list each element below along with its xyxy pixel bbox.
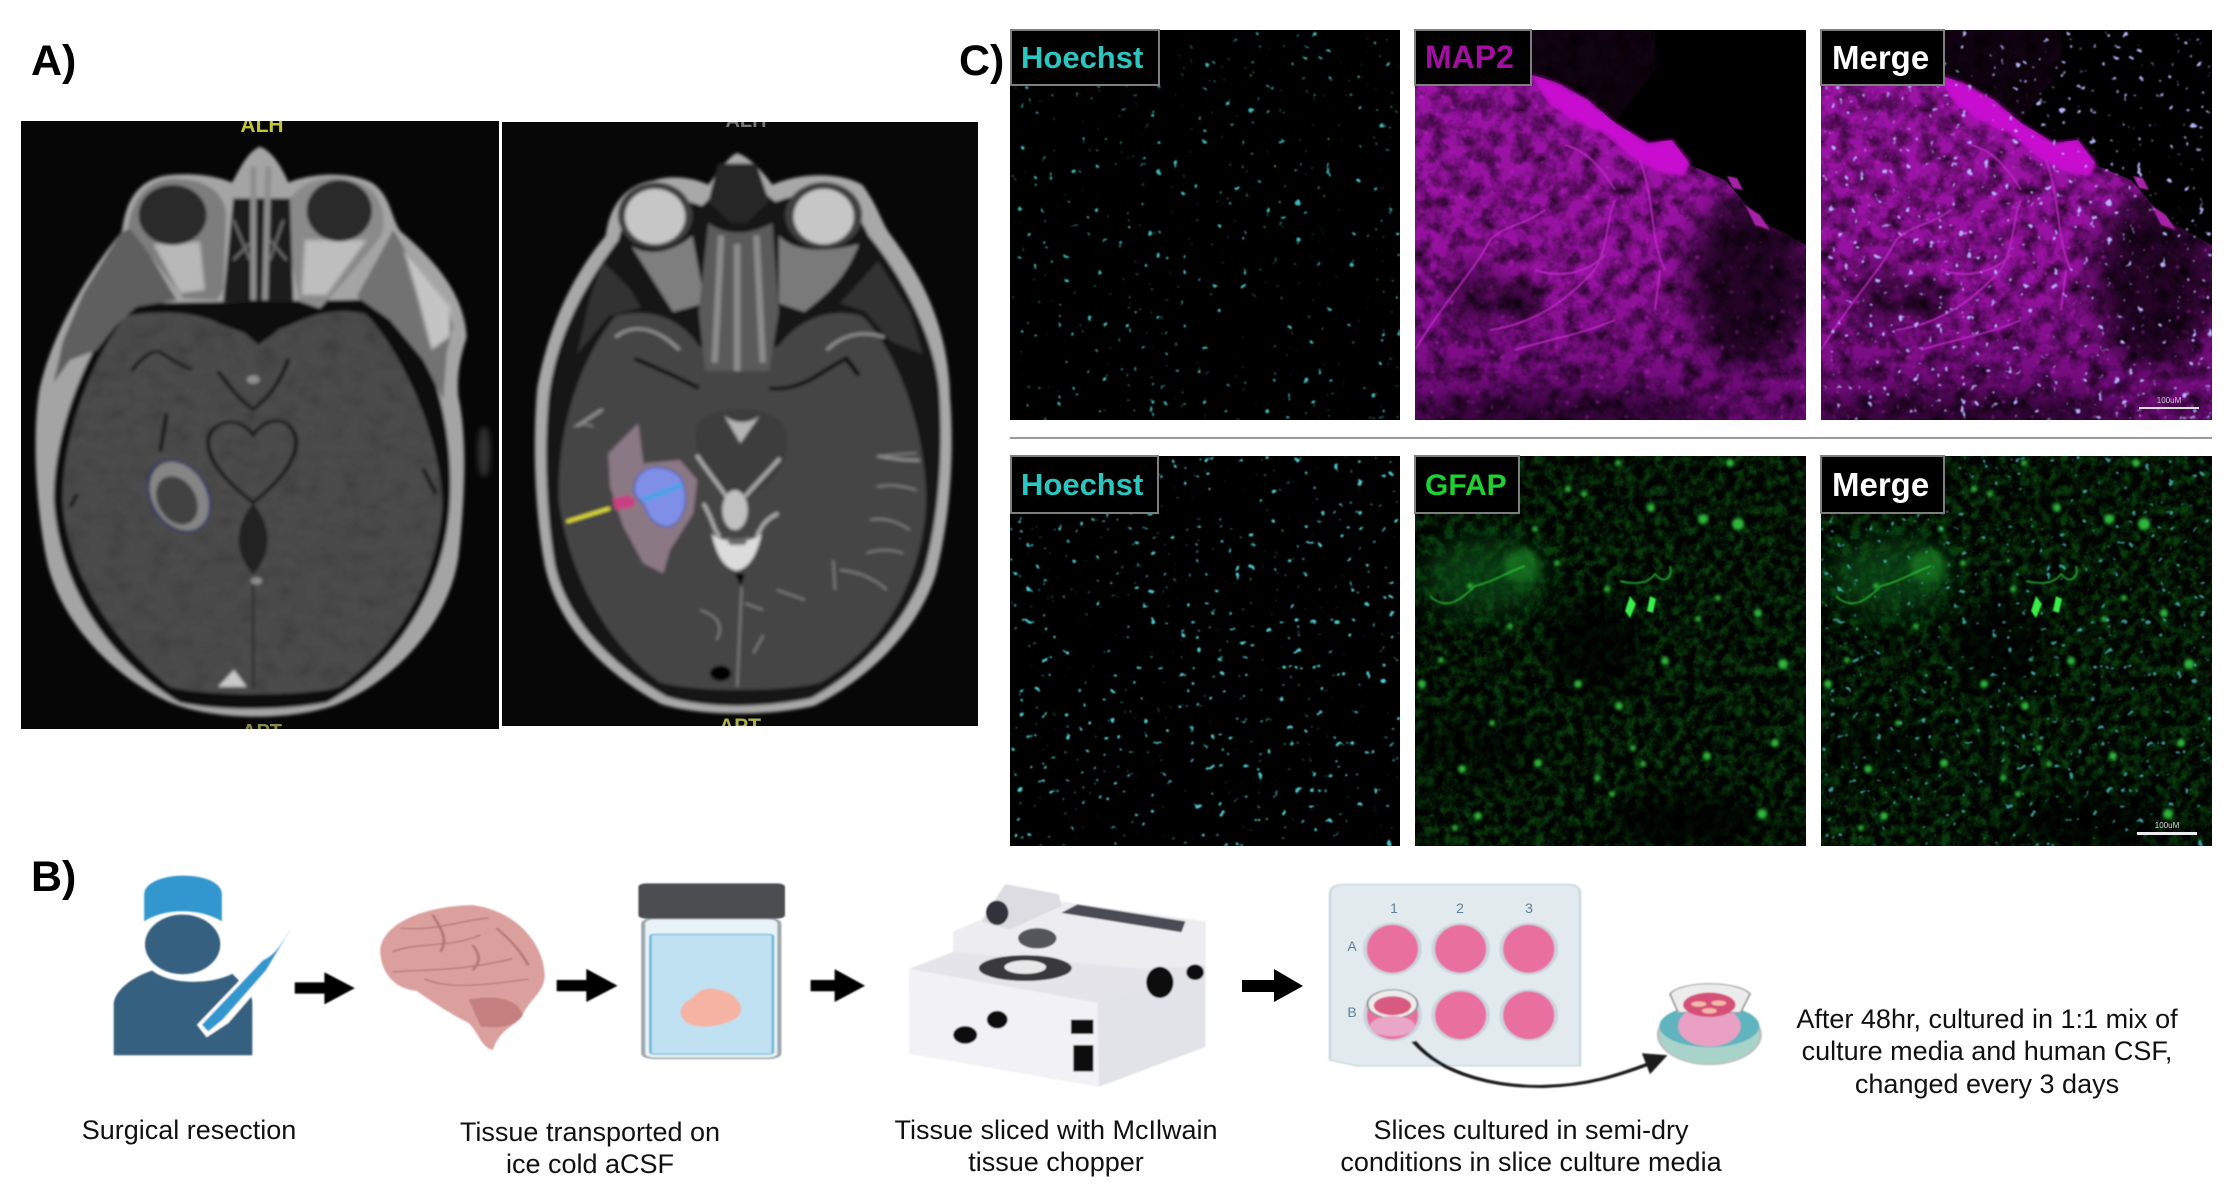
caption: slice culture: conditions in slice culture media (1340, 1147, 1723, 1177)
scale bar top (2139, 396, 2199, 409)
row divider (1010, 437, 2212, 439)
label: Hoechst top: Hoechst (1021, 40, 1143, 75)
cistern (697, 455, 780, 537)
label: Merge bottom (1821, 456, 1944, 513)
panel A: T1 contrast MRI scan (21, 114, 499, 743)
curved arrow (1414, 1041, 1650, 1086)
scalp outline (36, 147, 467, 717)
lower sulci (573, 424, 917, 687)
caption: tissue transport: ice cold aCSF (506, 1149, 674, 1179)
label: Merge bottom: Merge (1832, 466, 1929, 503)
midbrain (757, 414, 761, 416)
panel C: Hoechst top (1010, 30, 1400, 420)
left orbit (128, 179, 226, 300)
yellow arrow (567, 508, 610, 522)
panel C: MAP2 merge (1821, 30, 2218, 437)
nasal cavity (223, 198, 293, 302)
culture insert (1658, 984, 1761, 1064)
plate (1330, 884, 1580, 1066)
right scan: lower brain detail (567, 423, 917, 687)
panel A: T2 MRI scan (502, 110, 978, 738)
label: Merge top (1821, 30, 1944, 85)
arrow 4 (1242, 969, 1303, 1002)
MRI orientation label right: APT (719, 715, 761, 738)
brain parenchyma (559, 313, 926, 690)
right eye (785, 182, 862, 248)
MRI orientation label left: ALH (240, 114, 284, 137)
insert in well (1368, 990, 1418, 1036)
caption: culture after 48hr: After 48hr, cultured in 1:1 mix of (1796, 1004, 2178, 1034)
icon: jar with tissue (638, 883, 785, 1058)
caption: culture after 48hr: changed every 3 days (1855, 1069, 2119, 1099)
MRI bottom label left: APT (242, 721, 282, 743)
pink measure blob (613, 495, 636, 510)
panel B: six-well plate, culture insert and curved arrow (1330, 884, 1761, 1086)
label: Hoechst top (1011, 30, 1159, 85)
right orbit (290, 178, 384, 308)
plate labels: 3 (1525, 900, 1533, 916)
dark sulci and ventricles (71, 352, 436, 507)
label: GFAP: GFAP (1425, 469, 1507, 502)
skull dark ring (54, 299, 450, 709)
brain parenchyma (63, 312, 442, 694)
panel label: C: C) (959, 37, 1004, 85)
caption: slice culture: Slices cultured in semi-dry (1373, 1115, 1689, 1145)
plate labels: 2 (1456, 900, 1464, 916)
scale bar top: 100uM (2157, 396, 2182, 405)
scale bar bottom: 100uM (2155, 821, 2180, 830)
scalp outline (535, 153, 952, 714)
dark sinus (710, 666, 731, 681)
tumour (148, 460, 211, 532)
icon: McIlwain tissue chopper (909, 884, 1206, 1087)
arrow 3 (811, 969, 865, 1002)
caption: tissue chopper: tissue chopper (968, 1147, 1144, 1177)
panel C: GFAP (1415, 456, 1806, 846)
caption: culture after 48hr: culture media and human CSF, (1802, 1036, 2172, 1066)
plate labels (1347, 900, 1533, 1020)
panel C: GFAP merge (1821, 456, 2212, 846)
bright frontal sulci (577, 329, 920, 460)
label: Hoechst bottom (1011, 456, 1158, 513)
caption: tissue chopper: Tissue sliced with McIlwain (894, 1115, 1218, 1145)
panel label: A: A) (31, 37, 76, 85)
label: Merge top: Merge (1832, 39, 1929, 76)
arrow 2 (557, 969, 618, 1002)
plate labels: B (1347, 1004, 1357, 1020)
panel B: workflow icons (114, 876, 1206, 1087)
left eye (618, 182, 692, 248)
caption: surgical resection: Surgical resection (82, 1115, 296, 1145)
MRI top label right: ALH (725, 110, 767, 132)
arrow 1 (295, 972, 355, 1004)
caption: tissue transport: Tissue transported on (460, 1117, 720, 1147)
left scan: orbits and upper face (53, 167, 453, 400)
scale bar bottom (2137, 821, 2197, 835)
plate labels: 1 (1390, 900, 1398, 916)
orbital and frontal midline tissue (631, 236, 705, 312)
wells (1365, 924, 1556, 1040)
label: Hoechst bottom: Hoechst (1021, 467, 1143, 502)
icon: surgeon (114, 876, 295, 1055)
sylvian dark line (635, 358, 859, 389)
label: MAP2: MAP2 (1425, 39, 1514, 75)
panel C: Hoechst bottom (1010, 456, 1400, 846)
panel C: MAP2 (1415, 30, 1812, 437)
cyan measure line (643, 485, 682, 500)
tumour blue overlay (634, 467, 686, 527)
panel label: B: B) (31, 853, 76, 901)
label: MAP2 (1415, 30, 1531, 85)
plate labels: A (1347, 938, 1357, 954)
label: GFAP (1415, 456, 1519, 513)
oedema overlay (608, 423, 697, 573)
icon: brain (380, 905, 545, 1050)
tumour dotted outline (146, 458, 212, 534)
